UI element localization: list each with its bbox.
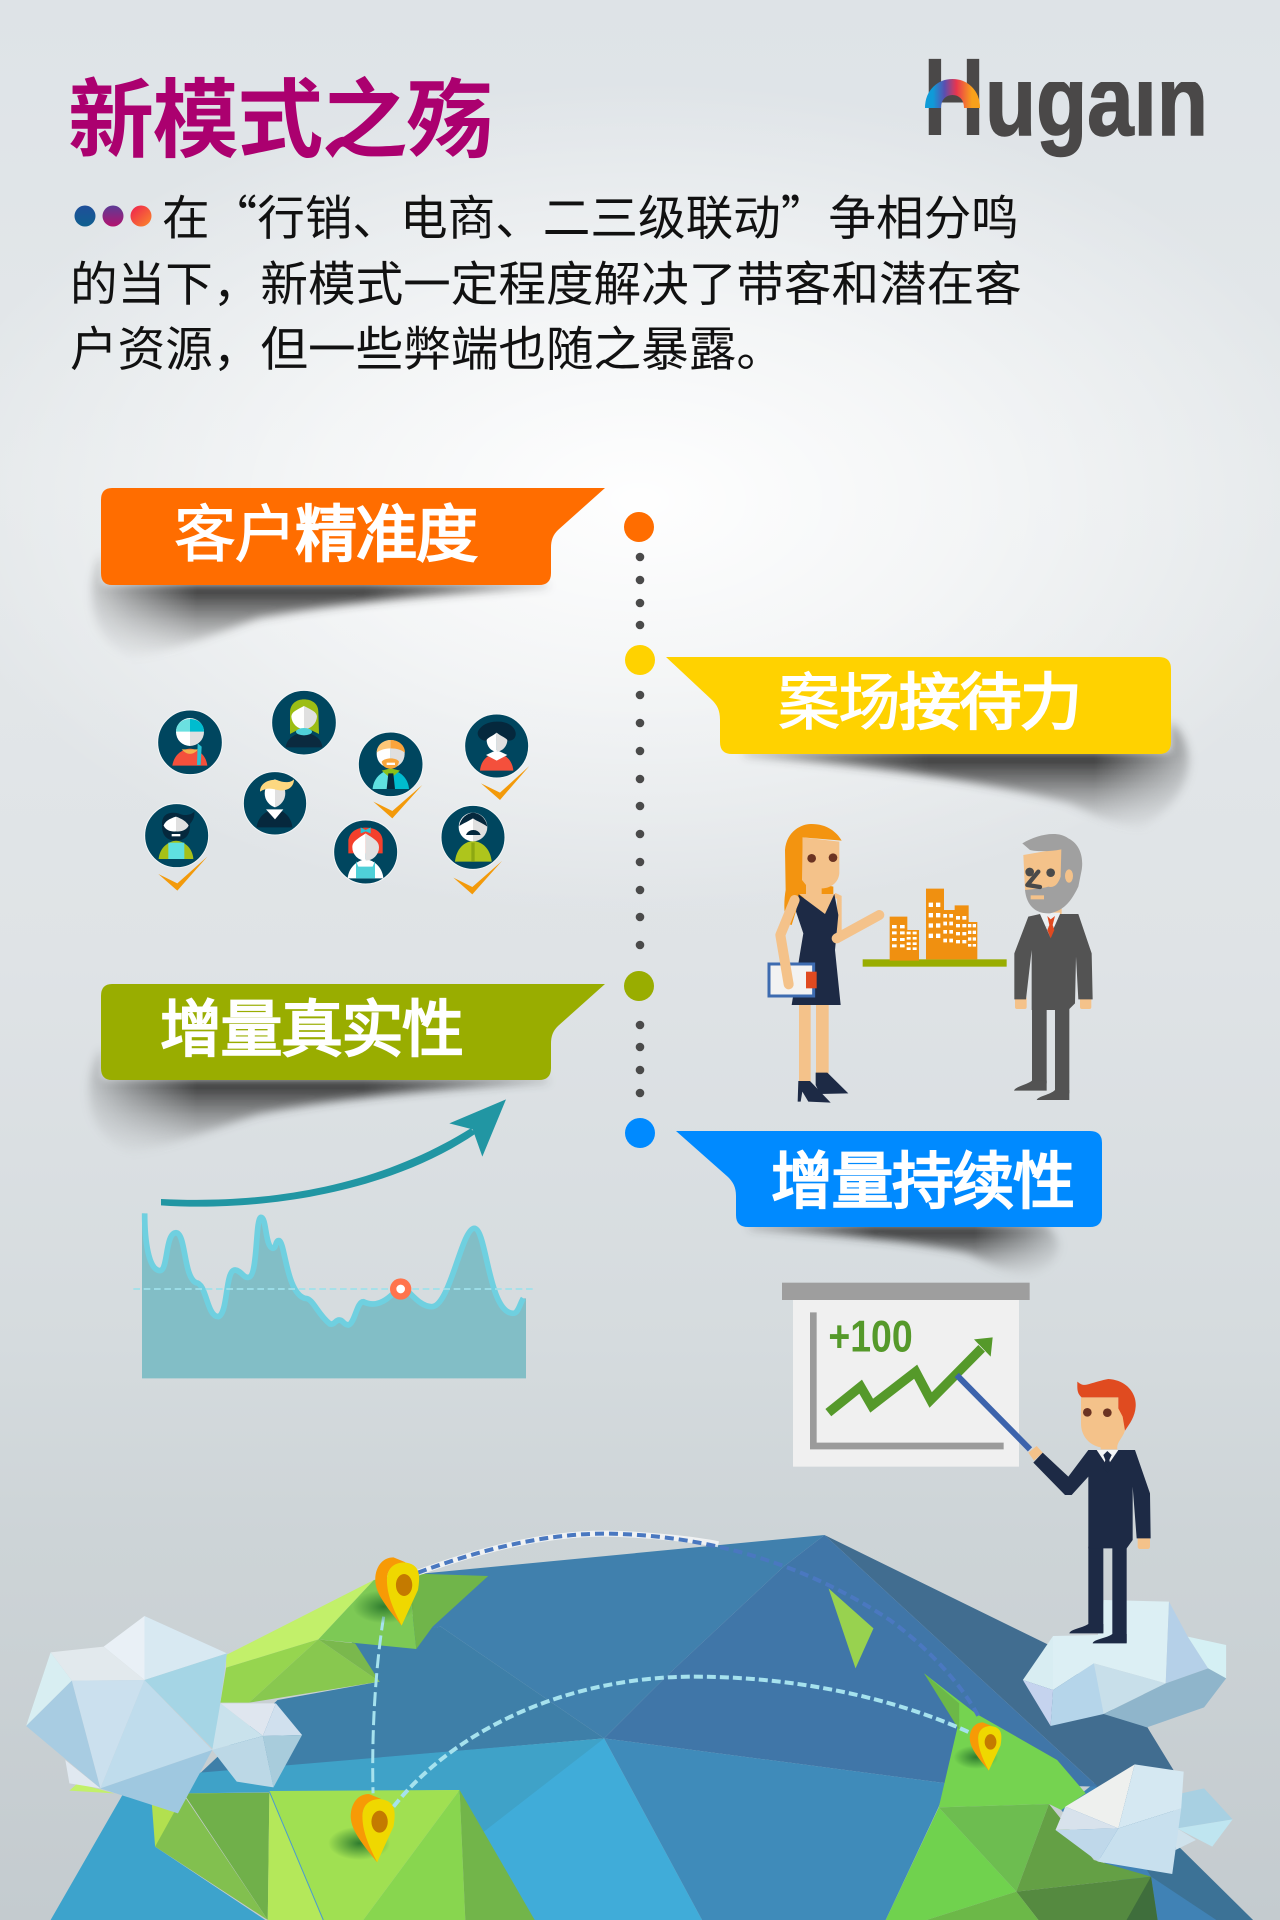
map pin 2 [328,1794,395,1862]
avatar 3: orange beard [358,732,423,797]
banner: 增量真实性 [88,984,605,1151]
cloud under presenter [1023,1600,1226,1727]
banner: 增量持续性: 增量持续性 [771,1148,1074,1217]
+100 label: +100 [828,1313,913,1362]
right land [886,1673,1158,1920]
city buildings on platform [863,889,1007,967]
cloud left [26,1616,302,1813]
timeline connector [624,512,655,1148]
map pin 1 [353,1557,419,1626]
paragraph text [70,180,1022,377]
rising arrow [161,1099,506,1207]
banner: 增量持续性 [676,1131,1102,1275]
timeline node blue [625,1118,655,1148]
timeline node orange [624,512,654,542]
avatar 8: moustache [441,805,505,869]
small green island [829,1588,873,1668]
avatar 5: blond hair [243,772,307,835]
timeline node yellow [625,645,655,675]
paragraph text: 的当下，新模式一定程度解决了带客和潜在客 [70,259,1022,312]
ocean facets [51,1535,1253,1920]
bearded businessman [1014,834,1093,1100]
timeline node green [624,971,654,1001]
avatar 1: cyan cap [158,710,222,775]
map pin 3 [954,1722,1001,1771]
banner: 案场接待力 [666,657,1190,827]
banner: 增量真实性: 增量真实性 [160,996,463,1065]
cloud lower right [1056,1764,1233,1874]
title: 新模式之殇 [68,73,491,169]
top-left land [220,1573,488,1703]
growth chart [133,1099,536,1378]
woman presenter [769,824,879,1103]
intro paragraph [70,180,1022,377]
presentation board [782,1283,1030,1467]
paragraph text: 在“行销、电商、二三级联动”争相分鸣 [162,180,1019,249]
dashed flight routes [373,1534,980,1807]
bullet dots [74,206,152,226]
logo: Hugain: H [923,36,985,159]
banner: 客户精准度: 客户精准度 [174,501,477,570]
check marks [158,766,529,894]
avatar 7: red bob hair [334,820,398,884]
presenter man [957,1375,1151,1643]
logo: Hugain: ugain [985,45,1208,157]
area chart [133,1213,536,1378]
logo: Hugain [925,58,1204,158]
paragraph text: 户资源，但一些弊端也随之暴露。 [70,324,784,377]
avatars group [145,690,529,894]
avatar 2: green hair [272,690,336,755]
avatar 6: dark beard [145,804,209,868]
globe low-poly [26,1534,1253,1920]
banner: 客户精准度 [91,488,605,656]
zigzag growth arrow [828,1337,993,1413]
presentation board and presenter [782,1283,1151,1643]
lower-left land [69,1783,535,1920]
sales scene illustration [769,824,1093,1103]
avatar 4: curly hair [465,714,529,778]
banner: 案场接待力: 案场接待力 [778,669,1081,738]
